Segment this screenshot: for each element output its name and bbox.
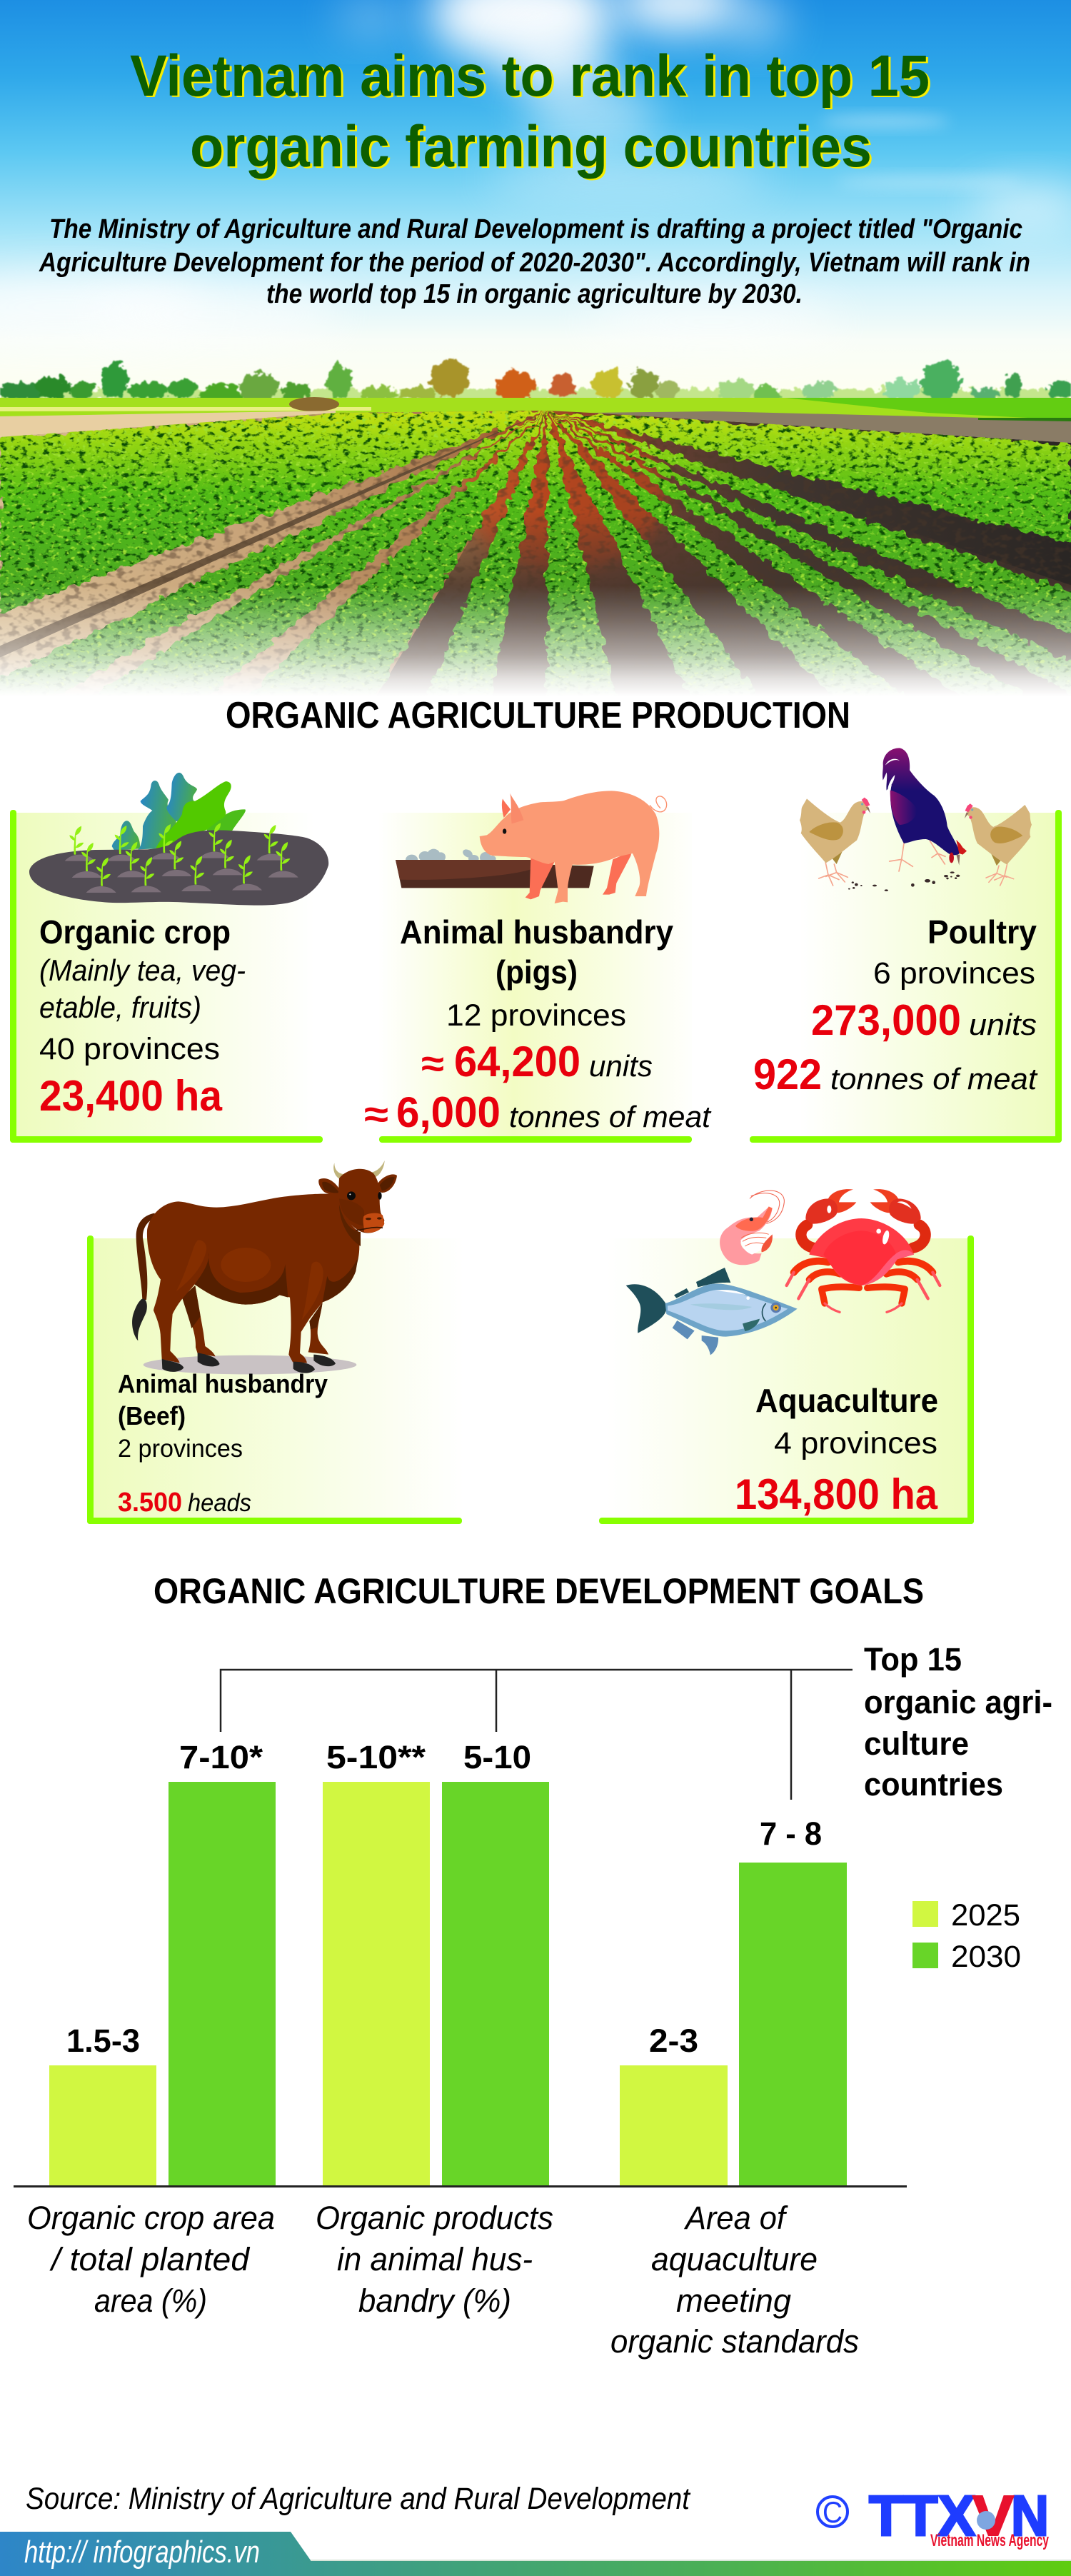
text: animal husbandry pigs: 6,000: [396, 1088, 501, 1136]
text: aquaculture: 134,800 ha: [735, 1470, 938, 1518]
category labels: / total planted: [49, 2241, 251, 2277]
text: animal husbandry pigs: [364, 913, 712, 1136]
text: organic crop: (Mainly tea, veg-: [39, 953, 246, 987]
source: Source: Ministry of Agriculture and Rural Development: [26, 2482, 691, 2516]
panel: organic crop: [10, 773, 328, 1143]
category labels: [27, 2200, 859, 2360]
callout: top 15 countries: organic agri-: [864, 1684, 1052, 1720]
logo: TTXVN Vietnam News Agency: V: [972, 2484, 1014, 2547]
heading: development goals: ORGANIC AGRICULTURE DEVELOPMENT GOALS: [154, 1571, 924, 1611]
background: sky: [0, 0, 1071, 400]
text: poultry: 922: [753, 1051, 822, 1098]
category labels: organic standards: [610, 2323, 859, 2360]
intro text: the world top 15 in organic agriculture by 2030.: [266, 279, 803, 309]
category labels: aquaculture: [651, 2241, 818, 2277]
value labels: 1.5-3: [66, 2023, 140, 2059]
legend: [912, 1898, 1021, 1974]
background: tree line: [0, 360, 1071, 443]
text: poultry: tonnes of meat: [830, 1062, 1038, 1096]
panel: animal husbandry (pigs): [364, 791, 712, 1143]
text: organic crop: [39, 913, 246, 1120]
text: aquaculture: Aquaculture: [755, 1382, 938, 1419]
text: aquaculture: [735, 1382, 938, 1518]
value labels: 5-10**: [326, 1739, 426, 1775]
callout: top 15 countries: Top 15: [864, 1641, 962, 1678]
text: animal husbandry beef: Animal husbandry: [118, 1369, 328, 1398]
heading: organic agriculture production: ORGANIC AGRICULTURE PRODUCTION: [226, 695, 850, 736]
text: animal husbandry beef: [118, 1369, 328, 1518]
footer band with url: http:// infographics.vn: [24, 2535, 260, 2570]
legend: 2025: [951, 1898, 1020, 1933]
text: poultry: 273,000: [811, 996, 961, 1044]
text: animal husbandry beef: 2 provinces: [118, 1435, 243, 1463]
callout: top 15 countries: countries: [864, 1766, 1003, 1803]
value labels: 2-3: [649, 2023, 698, 2059]
text: aquaculture: 4 provinces: [774, 1426, 937, 1460]
text: organic crop: Organic crop: [39, 913, 231, 951]
value labels: 7-10*: [179, 1739, 263, 1775]
text: animal husbandry beef: heads: [188, 1489, 251, 1517]
background: field fade to white: [0, 586, 1071, 718]
title: Vietnam aims to rank in top 15: [130, 44, 930, 109]
text: animal husbandry pigs: ≈: [421, 1043, 444, 1085]
text: animal husbandry pigs: units: [589, 1049, 653, 1083]
background: crop field photo: [0, 407, 1071, 714]
logo: TTXVN Vietnam News Agency: TTX: [869, 2484, 975, 2547]
bracket: top 15 connector: [221, 1670, 853, 1800]
icon: cow: [132, 1161, 397, 1374]
category labels: Area of: [683, 2200, 788, 2236]
text: animal husbandry beef: 3.500: [118, 1488, 182, 1518]
title: organic farming countries: [190, 114, 872, 179]
logo: TTXVN Vietnam News Agency: C: [823, 2495, 843, 2529]
text: animal husbandry pigs: Animal husbandry: [400, 913, 673, 951]
value labels: 7 - 8: [760, 1815, 822, 1852]
callout: top 15 countries: [864, 1641, 1052, 1803]
text: animal husbandry pigs: ≈: [364, 1094, 388, 1136]
dark furrow line: [0, 414, 541, 657]
legend: 2030: [951, 1940, 1021, 1974]
icon: crop seedlings in soil: [29, 773, 328, 906]
category labels: meeting: [676, 2282, 791, 2319]
category labels: bandry (%): [358, 2282, 511, 2319]
text: animal husbandry pigs: 12 provinces: [446, 998, 626, 1033]
axis: [14, 2185, 907, 2187]
text: poultry: 6 provinces: [873, 956, 1035, 991]
panel: aquaculture: [599, 1189, 974, 1524]
title: [130, 44, 930, 179]
text: animal husbandry pigs: tonnes of meat: [509, 1100, 712, 1133]
text: poultry: [753, 913, 1038, 1098]
footer band with url: [0, 2532, 1071, 2576]
text: animal husbandry pigs: (pigs): [496, 953, 578, 991]
panel: poultry: [750, 748, 1062, 1143]
bars: [49, 1782, 847, 2186]
text: organic crop: etable, fruits): [39, 991, 201, 1024]
text: animal husbandry pigs: 64,200: [454, 1038, 580, 1086]
category labels: Organic products: [316, 2200, 553, 2236]
icon: pig at trough: [396, 791, 667, 903]
value labels: [66, 1739, 822, 2059]
shrimp: [720, 1191, 784, 1265]
icon: shrimp, crab and fish: [626, 1189, 940, 1355]
panel: animal husbandry (beef): [87, 1161, 462, 1524]
category labels: area (%): [94, 2282, 207, 2319]
logo: TTXVN Vietnam News Agency: N: [1011, 2484, 1049, 2547]
category labels: in animal hus-: [337, 2241, 533, 2277]
callout: top 15 countries: culture: [864, 1725, 969, 1762]
text: organic crop: 23,400 ha: [39, 1072, 223, 1120]
category labels: Organic crop area: [27, 2200, 275, 2236]
icon: hens and rooster: [800, 748, 1032, 891]
intro text: [39, 214, 1030, 309]
logo: TTXVN Vietnam News Agency: [818, 2484, 1049, 2550]
text: poultry: units: [969, 1008, 1037, 1041]
bar chart: goals: [14, 1641, 1052, 2360]
text: poultry: Poultry: [927, 913, 1037, 951]
text: animal husbandry beef: (Beef): [118, 1401, 186, 1430]
fish: [626, 1268, 798, 1355]
text: organic crop: 40 provinces: [39, 1032, 220, 1066]
crab: [787, 1189, 940, 1312]
value labels: 5-10: [463, 1739, 531, 1775]
